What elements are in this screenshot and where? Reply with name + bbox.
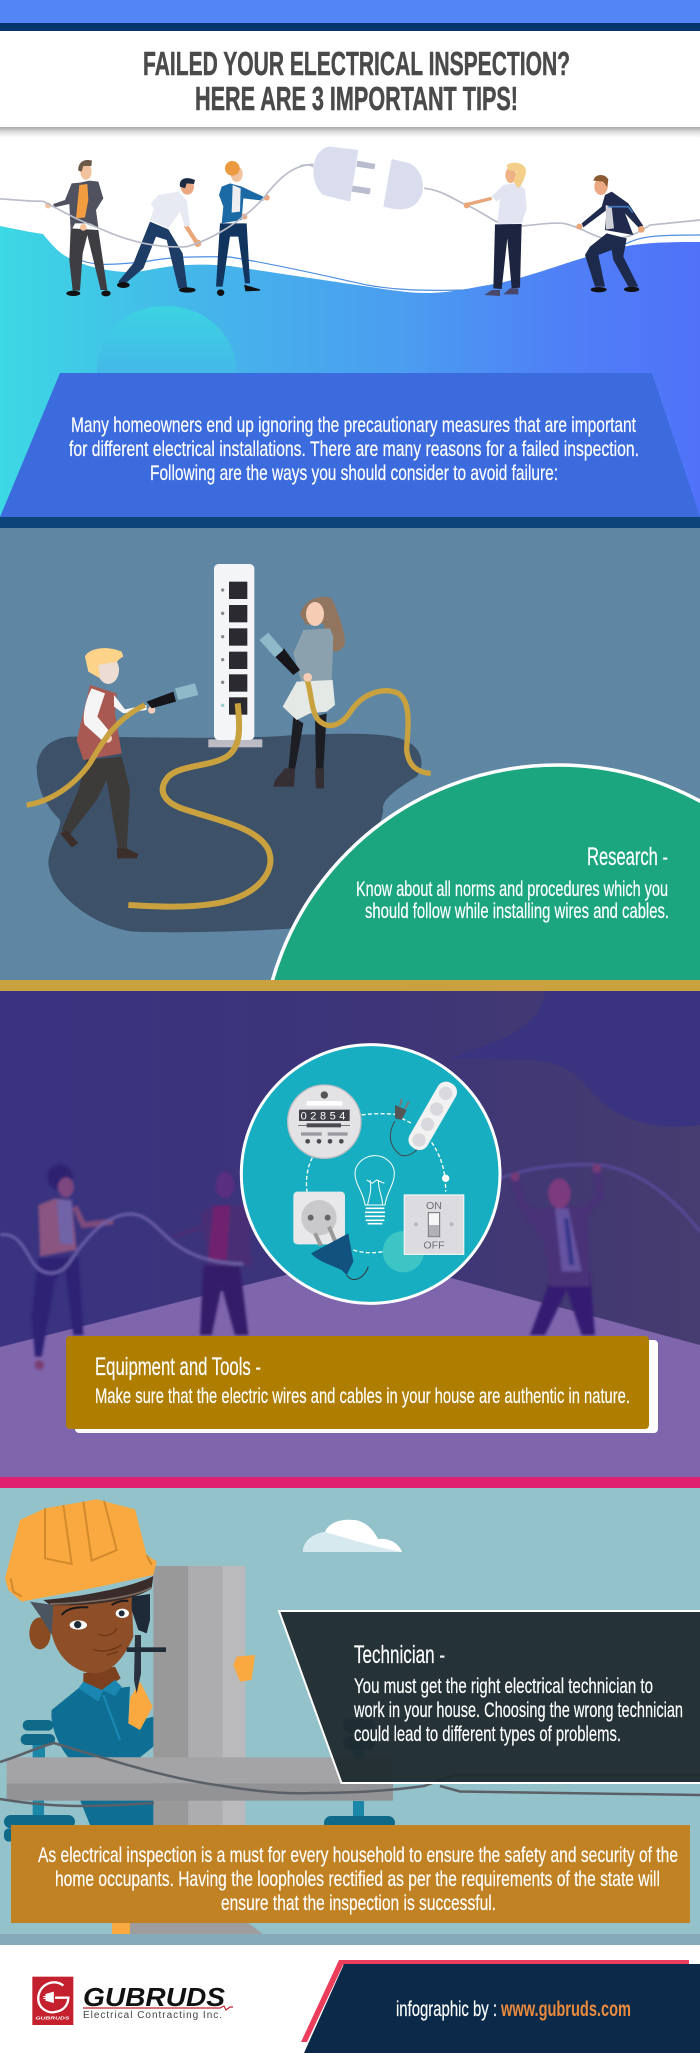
title line two: HERE ARE 3 IMPORTANT TIPS! bbox=[195, 80, 518, 117]
green circular callout bbox=[270, 763, 700, 980]
icon: on off switch bbox=[404, 1195, 464, 1254]
footer credit: www.gubruds.com bbox=[500, 1997, 631, 2021]
cable left bbox=[0, 164, 313, 247]
logo mark bbox=[32, 1977, 73, 2025]
wires bbox=[0, 1743, 700, 1806]
footer credit bbox=[396, 1997, 631, 2021]
person: man in navy suit bbox=[576, 175, 645, 292]
floor blob bbox=[37, 734, 421, 932]
equipment callout card bbox=[66, 1336, 658, 1433]
panel: technician section bbox=[0, 1488, 700, 1934]
equipment heading: Equipment and Tools - bbox=[95, 1353, 261, 1381]
technician text bbox=[353, 1674, 683, 1746]
accent circle bbox=[383, 1231, 424, 1272]
person: woman with cable bbox=[259, 597, 431, 788]
icon: on off switch: OFF bbox=[423, 1241, 445, 1252]
logo: gubruds bbox=[32, 1977, 233, 2025]
person: woman in blue jacket bbox=[216, 161, 270, 296]
panel: equipment section bbox=[0, 991, 700, 1477]
cable right bbox=[424, 188, 700, 239]
circle: electrical devices bbox=[241, 1045, 500, 1303]
logo mark: GUBRUDS bbox=[35, 2016, 70, 2022]
blurred people bbox=[0, 1164, 700, 1370]
blurred cable bbox=[0, 1214, 243, 1273]
crossbeam bbox=[7, 1757, 393, 1801]
footer credit: infographic by : bbox=[396, 1997, 497, 2021]
router tower bbox=[208, 564, 262, 747]
floor bbox=[0, 1255, 700, 1477]
technician figure bbox=[5, 1499, 255, 1825]
person: blurred man bbox=[173, 1172, 252, 1335]
hard hat bbox=[5, 1499, 157, 1602]
person: man with orange vest bbox=[45, 160, 111, 296]
people group left bbox=[0, 160, 313, 296]
icon: electric meter bbox=[288, 1085, 361, 1158]
title banner bbox=[0, 31, 700, 138]
footer red accent bbox=[301, 1960, 689, 2042]
person: man in white shirt bbox=[117, 178, 201, 293]
icon: light bulb bbox=[355, 1156, 394, 1224]
technician callout bbox=[279, 1611, 700, 1783]
research text bbox=[356, 877, 669, 923]
top banner bars bbox=[0, 0, 700, 31]
icon: wall socket and blue plug bbox=[293, 1192, 368, 1280]
illustration: technician and pole bbox=[4, 1499, 393, 1934]
logo tagline: Electrical Contracting Inc. bbox=[83, 2010, 222, 2021]
footer bbox=[0, 1945, 700, 2053]
illustration: router and people bbox=[27, 564, 431, 932]
panel: hero illustration bbox=[0, 147, 700, 528]
left insulators bbox=[4, 1720, 75, 1842]
icon: on off switch: ON bbox=[426, 1201, 442, 1212]
pole bbox=[153, 1566, 245, 1934]
person: blurred woman bbox=[32, 1165, 113, 1370]
panel: intro trapezoid bbox=[0, 373, 700, 517]
conclusion callout: ensure that the inspection is successful. bbox=[221, 1891, 496, 1915]
logo wordmark: GUBRUDS bbox=[83, 1982, 226, 2012]
person: blurred man lifting cable bbox=[500, 1164, 700, 1335]
person: blonde woman bbox=[464, 163, 527, 296]
cable to router bbox=[128, 703, 270, 907]
plug and right people group bbox=[300, 147, 700, 296]
thin blue wave line bbox=[80, 235, 700, 290]
gradient wave background bbox=[0, 226, 700, 528]
icon: plug halves bbox=[300, 147, 423, 209]
cloud bbox=[303, 1520, 402, 1552]
background dome bbox=[97, 306, 237, 373]
icon: power strip bbox=[390, 1078, 460, 1156]
icon: electric meter: 02854 bbox=[301, 1111, 348, 1123]
footer navy panel bbox=[304, 1964, 700, 2053]
panel: research section bbox=[0, 528, 700, 980]
person: man with cable bbox=[27, 648, 198, 858]
intro text bbox=[69, 413, 639, 485]
background blob bbox=[450, 991, 700, 1127]
conclusion callout bbox=[11, 1825, 690, 1923]
pole base and boot bbox=[112, 1923, 263, 1934]
technician heading: Technician - bbox=[354, 1641, 445, 1669]
right insulators bbox=[324, 1719, 395, 1830]
dashed connection lines bbox=[306, 1114, 446, 1253]
